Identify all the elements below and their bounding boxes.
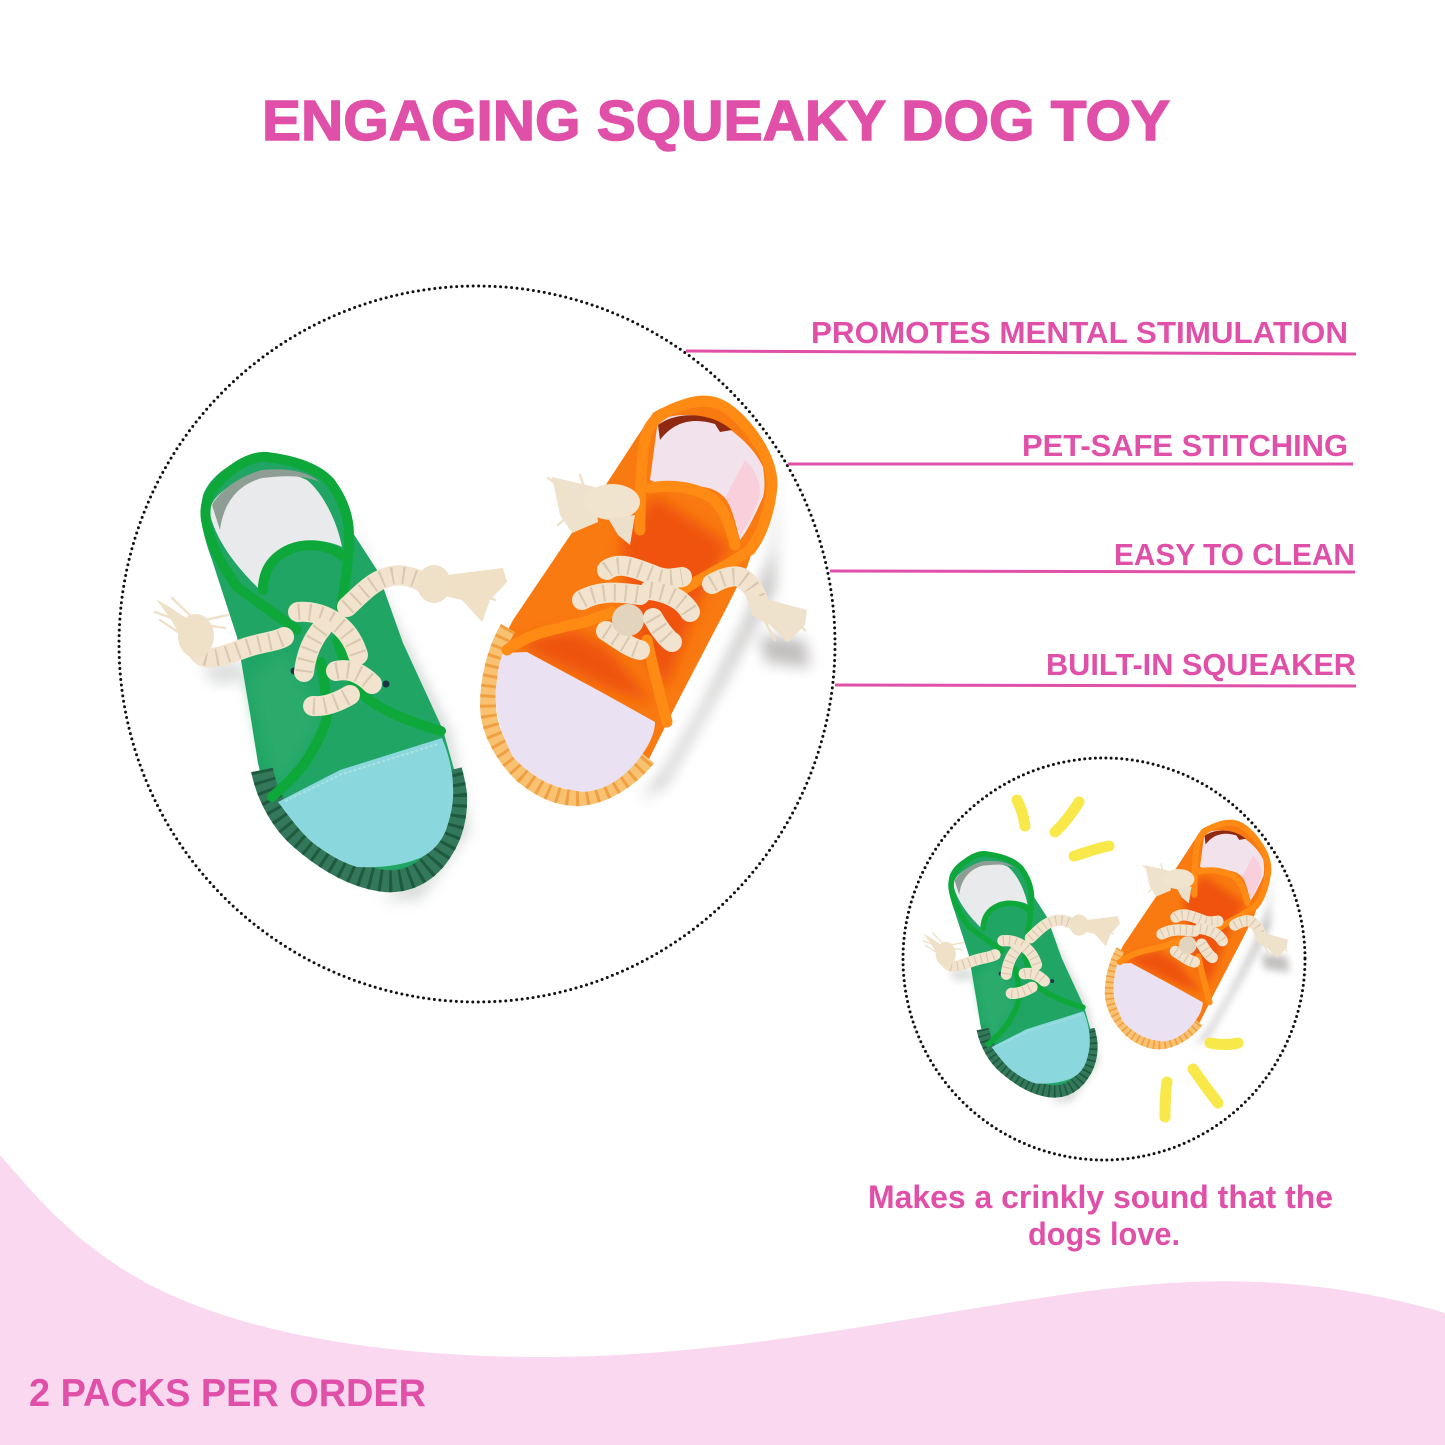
callout: easy to clean: EASY TO CLEAN: [1114, 537, 1355, 572]
rope laces: [548, 475, 807, 650]
sole: [488, 628, 648, 798]
icon: yellow squeak lines: [1017, 800, 1238, 1117]
caption: Makes a crinkly sound that the: [868, 1179, 1333, 1215]
toe cap: [278, 738, 453, 867]
small dotted circle: [903, 758, 1305, 1160]
caption: [868, 1179, 1333, 1252]
small product photo: [923, 820, 1290, 1102]
footer label: 2 PACKS PER ORDER: [29, 1372, 426, 1415]
caption: dogs love.: [1028, 1216, 1180, 1252]
rope laces: [155, 565, 507, 706]
shoe opening: [650, 415, 764, 540]
large product photo: two sneaker toys: [155, 397, 810, 900]
toe cap: [496, 652, 655, 792]
callout: built-in squeaker: BUILT-IN SQUEAKER: [1046, 647, 1356, 682]
title: ENGAGING SQUEAKY DOG TOY: [262, 89, 1170, 153]
orange piping: [640, 401, 772, 590]
callout: promotes mental stimulation: PROMOTES MENTAL STIMULATION: [811, 315, 1348, 350]
sole: [262, 770, 456, 881]
orange sneaker toy: [488, 397, 810, 800]
shoe opening: [210, 473, 342, 588]
callout: pet-safe stitching: PET-SAFE STITCHING: [1022, 428, 1348, 463]
green sneaker toy: [155, 454, 507, 900]
background wave: [0, 1155, 1445, 1445]
large dotted circle: [119, 286, 835, 1002]
green piping: [205, 457, 349, 630]
